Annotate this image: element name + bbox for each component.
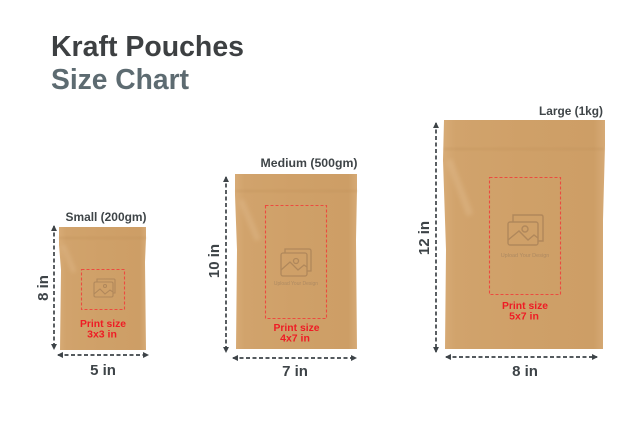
width label: 8 in [512, 363, 538, 380]
height label: 12 in [416, 221, 433, 255]
icon: image placeholder [94, 279, 115, 297]
name label: Large (1kg) [539, 106, 603, 118]
icon: image placeholder [508, 215, 543, 245]
print size label: Print size [502, 300, 548, 312]
pouch body [443, 120, 605, 349]
print size label: Print size [80, 318, 126, 330]
width arrow [233, 357, 356, 359]
print size label: 4x7 in [280, 332, 310, 344]
height arrow [225, 177, 227, 352]
name label: Medium (500gm) [260, 158, 358, 170]
title [51, 31, 244, 96]
name label: Small (200gm) [66, 212, 147, 224]
height label: 8 in [35, 275, 52, 301]
width arrow [446, 356, 597, 358]
print area [82, 270, 124, 310]
title: Kraft Pouches [51, 31, 244, 63]
print size label: Print size [274, 322, 320, 334]
print size label: 5x7 in [509, 310, 539, 322]
print area [266, 206, 326, 318]
print area [490, 178, 560, 294]
panel: large pouch [416, 106, 605, 380]
panel: small pouch [35, 212, 148, 379]
subtitle: Size Chart [51, 64, 189, 96]
pouch body [59, 227, 146, 350]
height arrow [53, 226, 55, 349]
upload caption: Upload Your Design [274, 281, 318, 287]
print size label: 3x3 in [87, 328, 117, 340]
width arrow [58, 354, 148, 356]
upload caption: Upload Your Design [501, 253, 549, 259]
panel: medium pouch [206, 158, 358, 380]
height label: 10 in [206, 244, 223, 278]
pouch body [235, 174, 357, 349]
height arrow [435, 123, 437, 352]
width label: 7 in [282, 363, 308, 380]
icon: image placeholder [281, 249, 311, 276]
width label: 5 in [90, 362, 116, 379]
